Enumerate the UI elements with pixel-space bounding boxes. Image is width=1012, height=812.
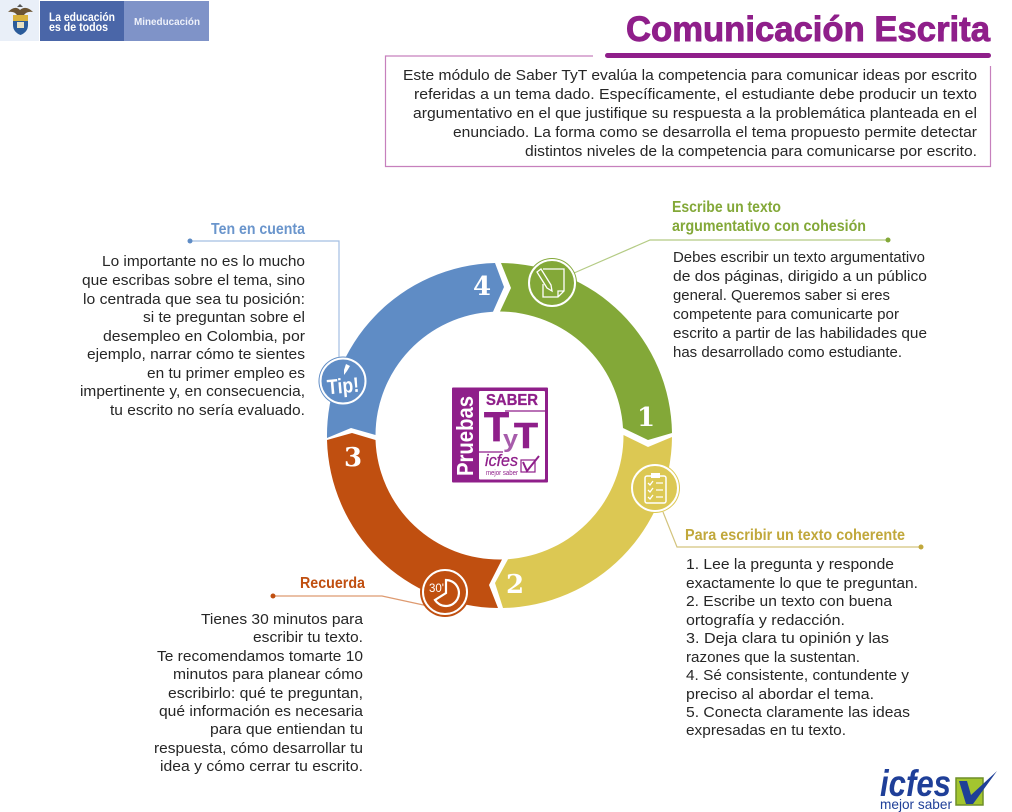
ring diagram bbox=[327, 263, 672, 608]
panel: tip note bbox=[80, 221, 305, 419]
panel: argumentative text bbox=[672, 199, 927, 361]
text block: tip note bbox=[80, 254, 305, 419]
connector: green bbox=[574, 238, 890, 273]
text block: argumentative text: Debes escribir un texto argumentativo bbox=[673, 250, 925, 266]
text block: reminder: idea y cómo cerrar tu escrito. bbox=[160, 759, 363, 775]
title underline bar bbox=[605, 53, 991, 58]
segment 1: green bbox=[500, 263, 672, 440]
heading: Recuerda: Recuerda bbox=[300, 575, 365, 592]
text block: tip note: que escribas sobre el tema, sino bbox=[82, 273, 305, 289]
number 2: 2 bbox=[506, 570, 524, 600]
heading: coherent text: Para escribir un texto coherente bbox=[685, 527, 905, 544]
number 4: 4 bbox=[473, 272, 491, 302]
segment 4: blue bbox=[327, 263, 504, 438]
logo: icfes mejor saber: mejor saber bbox=[880, 796, 952, 812]
logo: Mineducación header: es de todos bbox=[49, 22, 108, 34]
logo: Pruebas Saber TyT: icfes bbox=[485, 451, 518, 470]
text block: reminder: escribir tu texto. bbox=[253, 630, 363, 646]
text block: tip note: impertinente y, en consecuencia, bbox=[80, 384, 305, 400]
text block: coherent text steps: expresadas en tu texto. bbox=[686, 723, 846, 739]
text block: argumentative text: has desarrollado como estudiante. bbox=[673, 345, 902, 361]
text block: argumentative text: competente para comunicarte por bbox=[673, 307, 899, 323]
text block: introduction bbox=[403, 68, 977, 160]
text block: coherent text steps: preciso al abordar el tema. bbox=[686, 687, 874, 703]
number 1: 1 bbox=[637, 403, 655, 433]
text block: coherent text steps bbox=[686, 557, 918, 739]
text block: reminder bbox=[154, 612, 364, 775]
icon: tip: Tip! bbox=[326, 374, 360, 399]
logo: Mineducación header: La educación bbox=[49, 12, 115, 24]
heading: argumentative text: argumentativo con cohesión bbox=[672, 218, 866, 235]
logo: Mineducación header bbox=[0, 0, 209, 41]
text block: coherent text steps: ortografía y redacción. bbox=[686, 613, 845, 629]
icon: tip bbox=[318, 356, 368, 406]
text block: coherent text steps: 5. Conecta claramente las ideas bbox=[686, 705, 910, 721]
text block: reminder: minutos para planear cómo bbox=[173, 667, 363, 683]
text block: reminder: respuesta, cómo desarrollar tu bbox=[154, 741, 363, 757]
text block: reminder: Te recomendamos tomarte 10 bbox=[157, 649, 363, 665]
text block: argumentative text: general. Queremos saber si eres bbox=[673, 288, 890, 304]
connector: orange bbox=[270, 594, 428, 606]
text block: coherent text steps: razones que la sustentan. bbox=[686, 650, 860, 666]
text block: coherent text steps: 2. Escribe un texto con buena bbox=[686, 594, 893, 610]
text block: tip note: ejemplo, narrar cómo te sientes bbox=[87, 347, 305, 363]
text block: argumentative text: escrito a partir de las habilidades que bbox=[673, 326, 927, 342]
heading: argumentative text: Escribe un texto bbox=[672, 199, 781, 216]
logo: Pruebas Saber TyT: T bbox=[484, 403, 509, 450]
text block: reminder: Tienes 30 minutos para bbox=[201, 612, 364, 628]
text block: tip note: Lo importante no es lo mucho bbox=[102, 254, 305, 270]
logo: Mineducación header: Mineducación bbox=[134, 16, 200, 28]
logo: icfes mejor saber: icfes bbox=[880, 763, 951, 804]
panel: coherent text bbox=[685, 527, 918, 739]
text block: tip note: desempleo en Colombia, por bbox=[103, 329, 305, 345]
logo: Pruebas Saber TyT: y bbox=[503, 426, 519, 453]
icon: coat of arms bbox=[8, 4, 33, 35]
icon: 30 minute clock bbox=[420, 567, 470, 617]
text block: introduction: referidas a un tema dado. Específicamente, el estudiante debe producir un texto bbox=[414, 87, 977, 103]
text block: reminder: escribirlo: qué te preguntan, bbox=[168, 686, 363, 702]
text block: argumentative text: de dos páginas, dirigido a un público bbox=[673, 269, 927, 285]
text block: tip note: tu escrito no sería evaluado. bbox=[110, 403, 305, 419]
text block: tip note: lo centrada que sea tu posición: bbox=[83, 292, 305, 308]
text block: coherent text steps: exactamente lo que te preguntan. bbox=[686, 576, 918, 592]
number 3: 3 bbox=[344, 443, 362, 473]
text block: coherent text steps: 3. Deja clara tu opinión y las bbox=[686, 631, 889, 647]
text block: introduction: enunciado. La forma como se desarrolla el tema propuesto permite detectar bbox=[453, 125, 977, 141]
text block: introduction: argumentativo en el que justifique su respuesta a la problemática planteada en el bbox=[413, 106, 977, 122]
logo: Pruebas Saber TyT: T bbox=[514, 415, 538, 456]
text block: tip note: en tu primer empleo es bbox=[147, 366, 305, 382]
text block: coherent text steps: 4. Sé consistente, contundente y bbox=[686, 668, 910, 684]
icon: document and pencil bbox=[527, 258, 577, 308]
logo: icfes mejor saber bbox=[880, 763, 997, 812]
panel: reminder bbox=[154, 575, 365, 775]
text block: tip note: si te preguntan sobre el bbox=[143, 310, 305, 326]
text block: coherent text steps: 1. Lee la pregunta y responde bbox=[686, 557, 894, 573]
connector: yellow bbox=[663, 512, 924, 550]
text block: introduction: distintos niveles de la competencia para comunicarse por escrito. bbox=[525, 144, 977, 160]
text block: introduction: Este módulo de Saber TyT evalúa la competencia para comunicar ideas por escrito bbox=[403, 68, 977, 84]
text block: reminder: qué información es necesaria bbox=[159, 704, 364, 720]
text block: reminder: para que entiendan tu bbox=[210, 722, 363, 738]
logo: Pruebas Saber TyT bbox=[452, 388, 548, 482]
icon: clipboard checklist bbox=[630, 463, 680, 513]
text block: argumentative text bbox=[673, 250, 927, 361]
connector: blue bbox=[188, 238, 339, 365]
logo: Pruebas Saber TyT: mejor saber bbox=[486, 470, 519, 477]
segment 2: yellow bbox=[495, 435, 672, 608]
panel: introduction bbox=[386, 56, 990, 166]
heading: Ten en cuenta: Ten en cuenta bbox=[211, 221, 305, 238]
segment 3: orange bbox=[327, 433, 502, 608]
title: Comunicación Escrita bbox=[626, 10, 991, 49]
logo: Pruebas Saber TyT: Pruebas bbox=[452, 396, 478, 476]
heading: argumentative text bbox=[672, 199, 866, 235]
logo: Pruebas Saber TyT: SABER bbox=[486, 392, 538, 409]
icon: 30 minute clock: 30' bbox=[429, 583, 444, 595]
